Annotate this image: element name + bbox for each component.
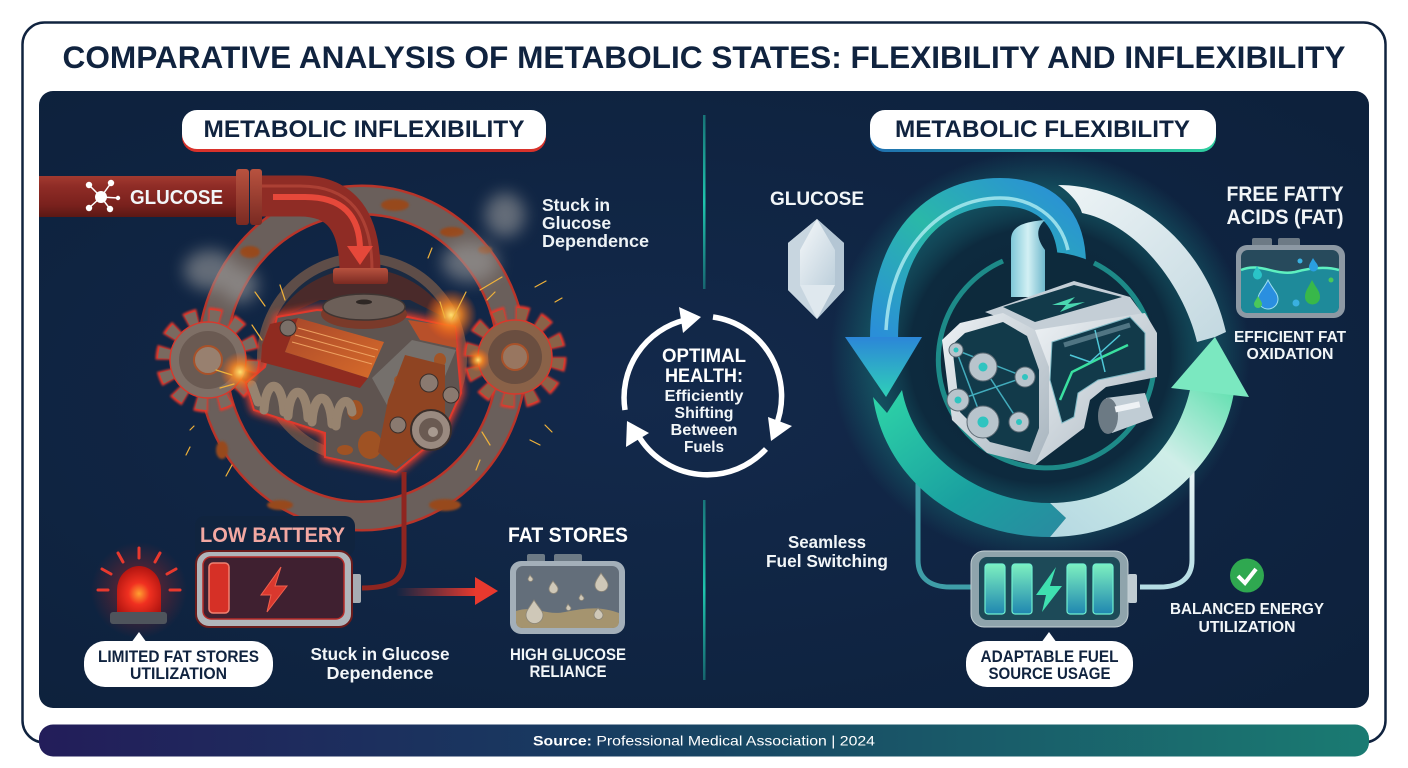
exhaust manifold: [252, 385, 352, 426]
pipe label: GLUCOSE: [130, 187, 223, 209]
panel: metabolic flexibility: [766, 110, 1346, 687]
low battery label: LOW BATTERY: [200, 524, 345, 547]
source text: Source: Professional Medical Association | 2024: [533, 732, 875, 748]
annotation: stuck in glucose dependence: Glucose: [542, 213, 611, 233]
icon: green check: [1230, 558, 1264, 592]
callout: adaptable fuel source usage: ADAPTABLE FUEL: [980, 648, 1118, 666]
heading: metabolic flexibility pill: METABOLIC FLEXIBILITY: [895, 116, 1190, 143]
callout: limited fat stores utilization: [84, 632, 273, 687]
right wire: [1140, 470, 1192, 587]
caption: seamless fuel switching: [766, 532, 888, 571]
left wire: [918, 472, 971, 587]
centre text: Efficiently: [664, 388, 744, 405]
callout: adaptable fuel source usage: [966, 632, 1133, 687]
caption: stuck in glucose dependence: Stuck in Glucose: [310, 644, 450, 664]
icon: full battery: [971, 551, 1137, 627]
centre text: HEALTH:: [665, 366, 743, 387]
heading: metabolic inflexibility pill: METABOLIC INFLEXIBILITY: [204, 116, 524, 143]
panel: metabolic inflexibility: [39, 110, 649, 687]
icon: left rusty gear: [166, 318, 250, 402]
arrow: teal band along bottom left: [873, 390, 1066, 537]
caption: seamless fuel switching: Seamless: [788, 532, 866, 552]
wire from engine to battery: [362, 472, 404, 588]
caption: efficient fat oxidation: OXIDATION: [1246, 346, 1334, 363]
backing plate behind low battery: [195, 516, 355, 556]
footer bar: [39, 724, 1369, 756]
rust patches: [337, 353, 446, 459]
top face: [985, 281, 1147, 332]
divider bottom: [703, 500, 706, 680]
caption: seamless fuel switching: Fuel Switching: [766, 551, 888, 571]
vertical tube: [1011, 220, 1045, 297]
arc arrow: upper left: [624, 307, 701, 410]
heading: metabolic flexibility pill: [870, 110, 1216, 152]
centre text: Fuels: [684, 439, 724, 456]
inner ring: [938, 261, 1154, 468]
caption: stuck in glucose dependence: [310, 644, 450, 683]
icon: red alarm light: [91, 542, 187, 638]
arc arrow: right: [713, 317, 792, 441]
centre text: Between: [670, 422, 738, 439]
icon: smoke: [184, 193, 525, 303]
rusty ring behind engine: [212, 191, 512, 516]
caption: high glucose reliance: HIGH GLUCOSE: [510, 646, 626, 664]
arrow: white band from top to right: [1058, 185, 1226, 342]
centre text: OPTIMAL: [662, 346, 746, 367]
centre text: [662, 346, 746, 456]
icon: molecule: [86, 180, 120, 212]
belts: [956, 350, 1025, 422]
arrow inside pipe: [273, 197, 373, 265]
glucose label: GLUCOSE: [770, 189, 864, 210]
caption: balanced energy utilization: BALANCED ENERGY: [1170, 601, 1324, 618]
air cleaner: [321, 294, 407, 329]
annotation: stuck in glucose dependence: [542, 195, 649, 251]
right cylinder head: [408, 320, 457, 348]
callout: limited fat stores utilization: UTILIZATION: [130, 665, 227, 683]
heading: metabolic inflexibility pill: [182, 110, 546, 152]
droplets: [1253, 258, 1334, 309]
icon: futuristic engine: [942, 281, 1157, 465]
arrow: battery to fat stores: [396, 577, 498, 605]
caption: balanced energy utilization: UTILIZATION: [1198, 619, 1296, 636]
arrow: blue band from top to left: [845, 192, 1080, 397]
annotation: stuck in glucose dependence: Dependence: [542, 231, 649, 251]
icon: fat stores battery: [510, 554, 625, 634]
callout: adaptable fuel source usage: SOURCE USAGE: [988, 665, 1110, 683]
caption: balanced energy utilization: [1170, 601, 1324, 636]
icon: low battery: [196, 551, 361, 627]
caption: high glucose reliance: RELIANCE: [530, 663, 606, 681]
pulleys: [947, 343, 1035, 438]
caption: high glucose reliance: [510, 646, 626, 681]
icon: fat tank: [1236, 238, 1345, 318]
cycle arrows: [624, 307, 792, 475]
icon: glucose crystal: [788, 219, 844, 319]
window: [1050, 317, 1145, 423]
main dark panel: [39, 91, 1369, 708]
cylinder: [1098, 393, 1153, 434]
centre text: Shifting: [674, 405, 734, 422]
pulleys: [390, 374, 459, 450]
orange timing housing: [378, 355, 445, 468]
title: COMPARATIVE ANALYSIS OF METABOLIC STATES: FLEXIBILITY AND INFLEXIBILITY: [62, 39, 1346, 75]
right body: [1035, 313, 1157, 465]
fat droplets: [526, 573, 608, 624]
icon: broken engine: [246, 294, 461, 472]
free fatty acids label: ACIDS (FAT): [1226, 206, 1344, 229]
panel: centre optimal health: [624, 115, 792, 680]
glow behind cycle: [830, 150, 1250, 560]
front face: [942, 313, 1049, 465]
wires to battery: [918, 470, 1192, 587]
arrow: light band up to right: [1050, 337, 1249, 537]
valve cover: [261, 318, 384, 388]
icon: right rusty gear: [474, 316, 556, 398]
annotation: stuck in glucose dependence: Stuck in: [542, 195, 610, 215]
free fatty acids label: [1226, 183, 1344, 229]
pipe with glucose label: [39, 169, 388, 284]
inner disc: [939, 252, 1155, 468]
caption: efficient fat oxidation: EFFICIENT FAT: [1234, 329, 1346, 346]
arc arrow: bottom: [626, 421, 766, 475]
caption: stuck in glucose dependence: Dependence: [326, 663, 434, 683]
callout: limited fat stores utilization: LIMITED FAT STORES: [98, 648, 259, 666]
free fatty acids label: FREE FATTY: [1226, 183, 1344, 206]
divider top: [703, 115, 706, 289]
fat stores label: FAT STORES: [508, 524, 628, 547]
icon: sparks: [186, 248, 562, 476]
caption: efficient fat oxidation: [1234, 329, 1346, 363]
